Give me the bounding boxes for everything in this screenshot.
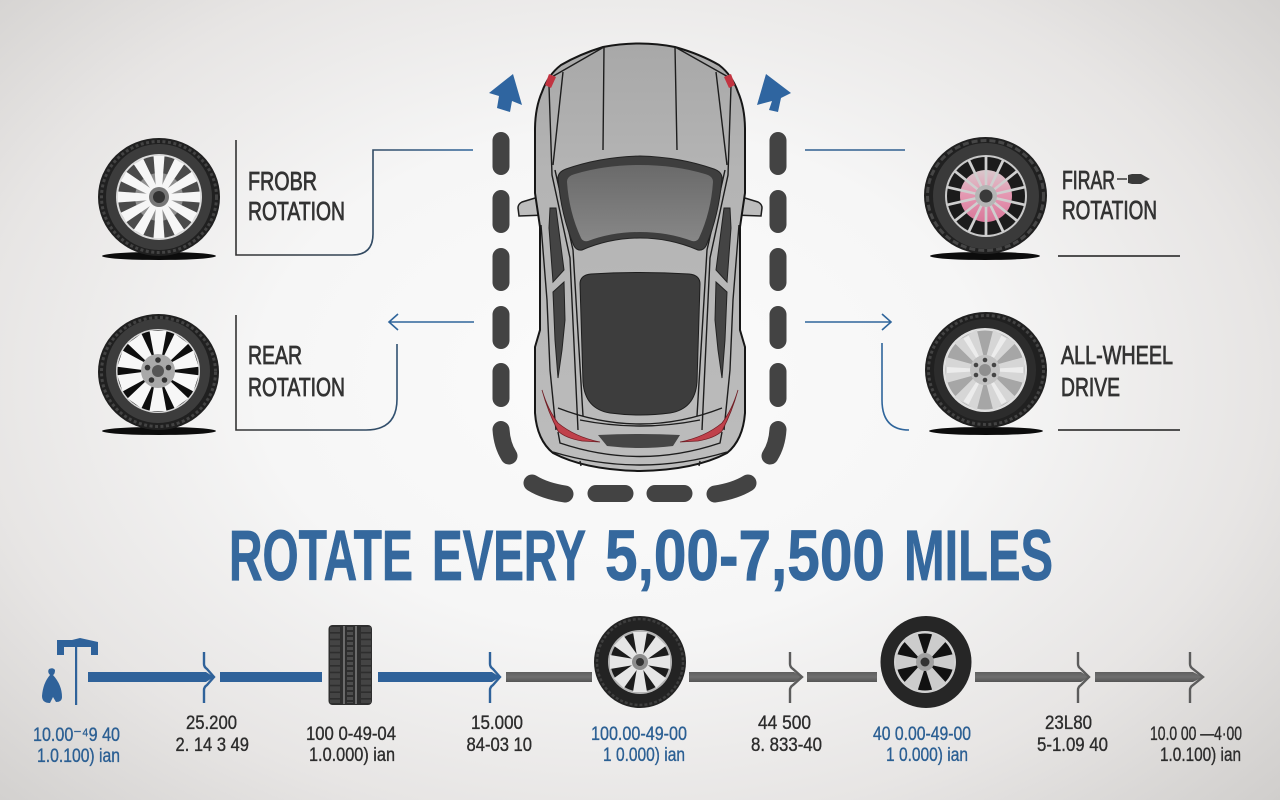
label: firar rotation: ROTATION [1062,195,1157,225]
icon: plug beside firar label [1117,174,1150,184]
label: front rotation: FROBR [248,166,317,196]
timeline label 6: 8. 833-40 [751,735,822,756]
label: rear rotation [248,340,345,402]
timeline label 6: 44 500 [758,713,811,734]
timeline label 2: 25.200 [186,713,237,734]
wheel: all-wheel drive [925,312,1047,435]
wheel: rear rotation [98,314,219,435]
label: all-wheel drive: ALL-WHEEL [1061,340,1173,370]
timeline label 9 [1150,724,1242,766]
tail lights [542,390,600,442]
wheel: timeline six-spoke wheel [880,616,972,708]
timeline label 4: 84-03 10 [466,735,532,756]
icon: start marker with sign post and figure [42,638,98,705]
label: all-wheel drive [1061,340,1173,402]
timeline label 7 [873,724,971,766]
timeline label 2 [176,713,249,756]
rotation path: dashed track around car [501,140,778,494]
timeline label 8 [1037,713,1108,756]
timeline label 2: 2. 14 3 49 [176,735,249,756]
car hood and pillar lines [541,47,739,466]
timeline label 1: 10.00⁻⁴9 40 [33,725,120,746]
timeline label 4 [466,713,532,756]
label: all-wheel drive: DRIVE [1061,372,1120,402]
windshield [558,156,722,250]
car mirrors [518,195,762,216]
car: top view [518,44,762,471]
timeline label 6 [751,713,822,756]
title: 5,00-7,500 [605,517,885,596]
timeline label 1 [33,725,120,767]
grey timeline segments [506,672,1203,682]
arrow: right upward direction [757,74,791,112]
arrow: all-wheel rotation pointing right [805,314,891,330]
timeline chevron markers [204,652,1203,703]
timeline label 8: 23L80 [1045,713,1092,734]
title: MILES [904,517,1053,596]
title [229,517,1053,596]
label: firar rotation: FIRAR [1062,165,1115,195]
timeline label 3 [306,724,396,766]
timeline label 5: 1 0.000) ian [603,745,685,766]
title: EVERY [432,517,586,596]
arrow: rear rotation pointing left [389,314,474,330]
timeline label 4: 15.000 [471,713,523,734]
timeline label 3: 1.0.000) ian [309,745,395,766]
blue timeline segments [88,672,500,682]
timeline label 3: 100 0-49-04 [306,724,396,745]
label: front rotation [248,166,345,226]
label: rear rotation: REAR [248,340,302,370]
timeline label 5: 100.00-49-00 [591,724,687,745]
icon: tire front view [328,625,372,705]
timeline label 7: 40 0.00-49-00 [873,724,971,745]
divider under all-wheel label [1058,429,1180,431]
timeline label 9: 1.0.100) ian [1160,745,1241,766]
timeline label 8: 5-1.09 40 [1037,735,1108,756]
side windows [549,208,565,378]
wheel: front-axle rotation, pink brake disc [924,137,1047,260]
left route: front rotation connector [236,140,473,255]
headlight markers [545,74,735,88]
right route: all-wheel connector [882,343,909,430]
timeline label 9: 10.0 00 —4·00 [1150,724,1242,745]
arrow: left upward direction [489,74,522,112]
timeline label 1: 1.0.100) ian [37,746,120,767]
divider under firar label [1058,255,1180,257]
label: rear rotation: ROTATION [248,372,345,402]
car body shell [535,44,745,471]
timeline label 5 [591,724,687,766]
label: front rotation: ROTATION [248,196,345,226]
label: firar rotation [1062,165,1157,225]
left route: rear rotation connector [236,315,397,430]
rear panel [598,434,680,448]
rear glass [580,272,700,415]
title: ROTATE [229,517,413,596]
right route: front line [805,149,905,151]
wheel: timeline silver wheel [594,616,686,708]
wheel: front rotation [98,138,220,260]
timeline [33,616,1242,767]
timeline label 7: 1 0.000) ian [886,745,968,766]
